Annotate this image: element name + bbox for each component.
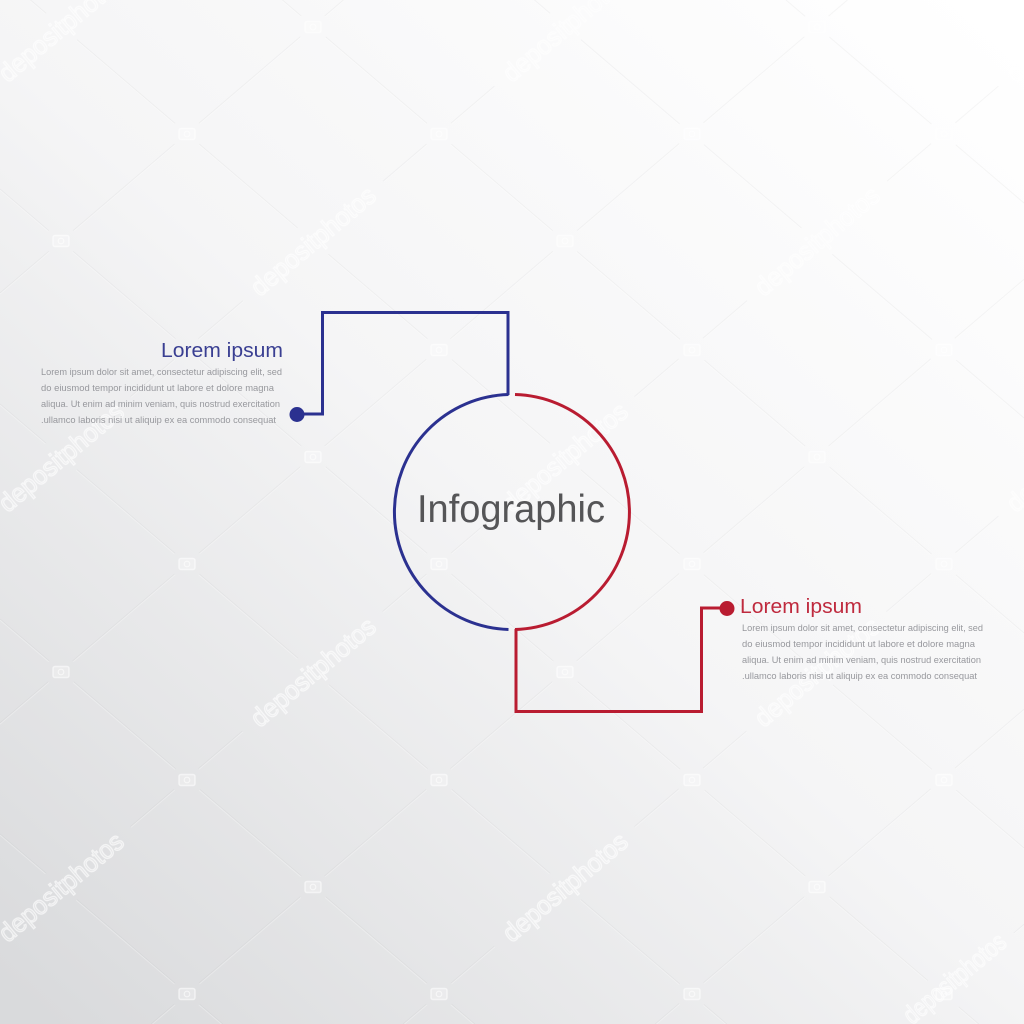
left body text: Lorem ipsum dolor sit amet, consectetur adipiscing elit, sed (41, 367, 282, 377)
watermark pattern: depositphotos (244, 611, 382, 733)
left body text: .ullamco laboris nisi ut aliquip ex ea commodo consequat (41, 415, 276, 425)
left body text (41, 367, 282, 425)
blue end dot (290, 407, 304, 422)
center title: Infographic (417, 488, 605, 531)
right body text: do eiusmod tempor incididunt ut labore et dolore magna (742, 639, 976, 649)
left body text: aliqua. Ut enim ad minim veniam, quis nostrud exercitation (41, 399, 280, 409)
red connector and right arc (515, 395, 727, 712)
watermark pattern: depositphotos (244, 180, 382, 302)
blue semicircle (394, 395, 508, 629)
left body text: do eiusmod tempor incididunt ut labore et dolore magna (41, 383, 275, 393)
watermark pattern: depositphotos (748, 180, 886, 302)
watermark pattern: depositphotos (496, 826, 634, 948)
right body text: .ullamco laboris nisi ut aliquip ex ea commodo consequat (742, 671, 977, 681)
watermark pattern: depositphotos (496, 396, 634, 518)
blue connector and left arc (297, 312, 508, 629)
red elbow line (516, 608, 727, 712)
left text block (41, 340, 283, 425)
right body text: Lorem ipsum dolor sit amet, consectetur adipiscing elit, sed (742, 623, 983, 633)
right body text (742, 623, 983, 681)
red end dot (720, 601, 734, 616)
watermark pattern: depositphotos (748, 611, 886, 733)
left heading: Lorem ipsum (161, 340, 283, 362)
red semicircle (515, 395, 629, 629)
blue elbow line (297, 312, 508, 414)
right heading: Lorem ipsum (740, 596, 862, 618)
right body text: aliqua. Ut enim ad minim veniam, quis nostrud exercitation (742, 655, 981, 665)
right text block (740, 596, 983, 681)
